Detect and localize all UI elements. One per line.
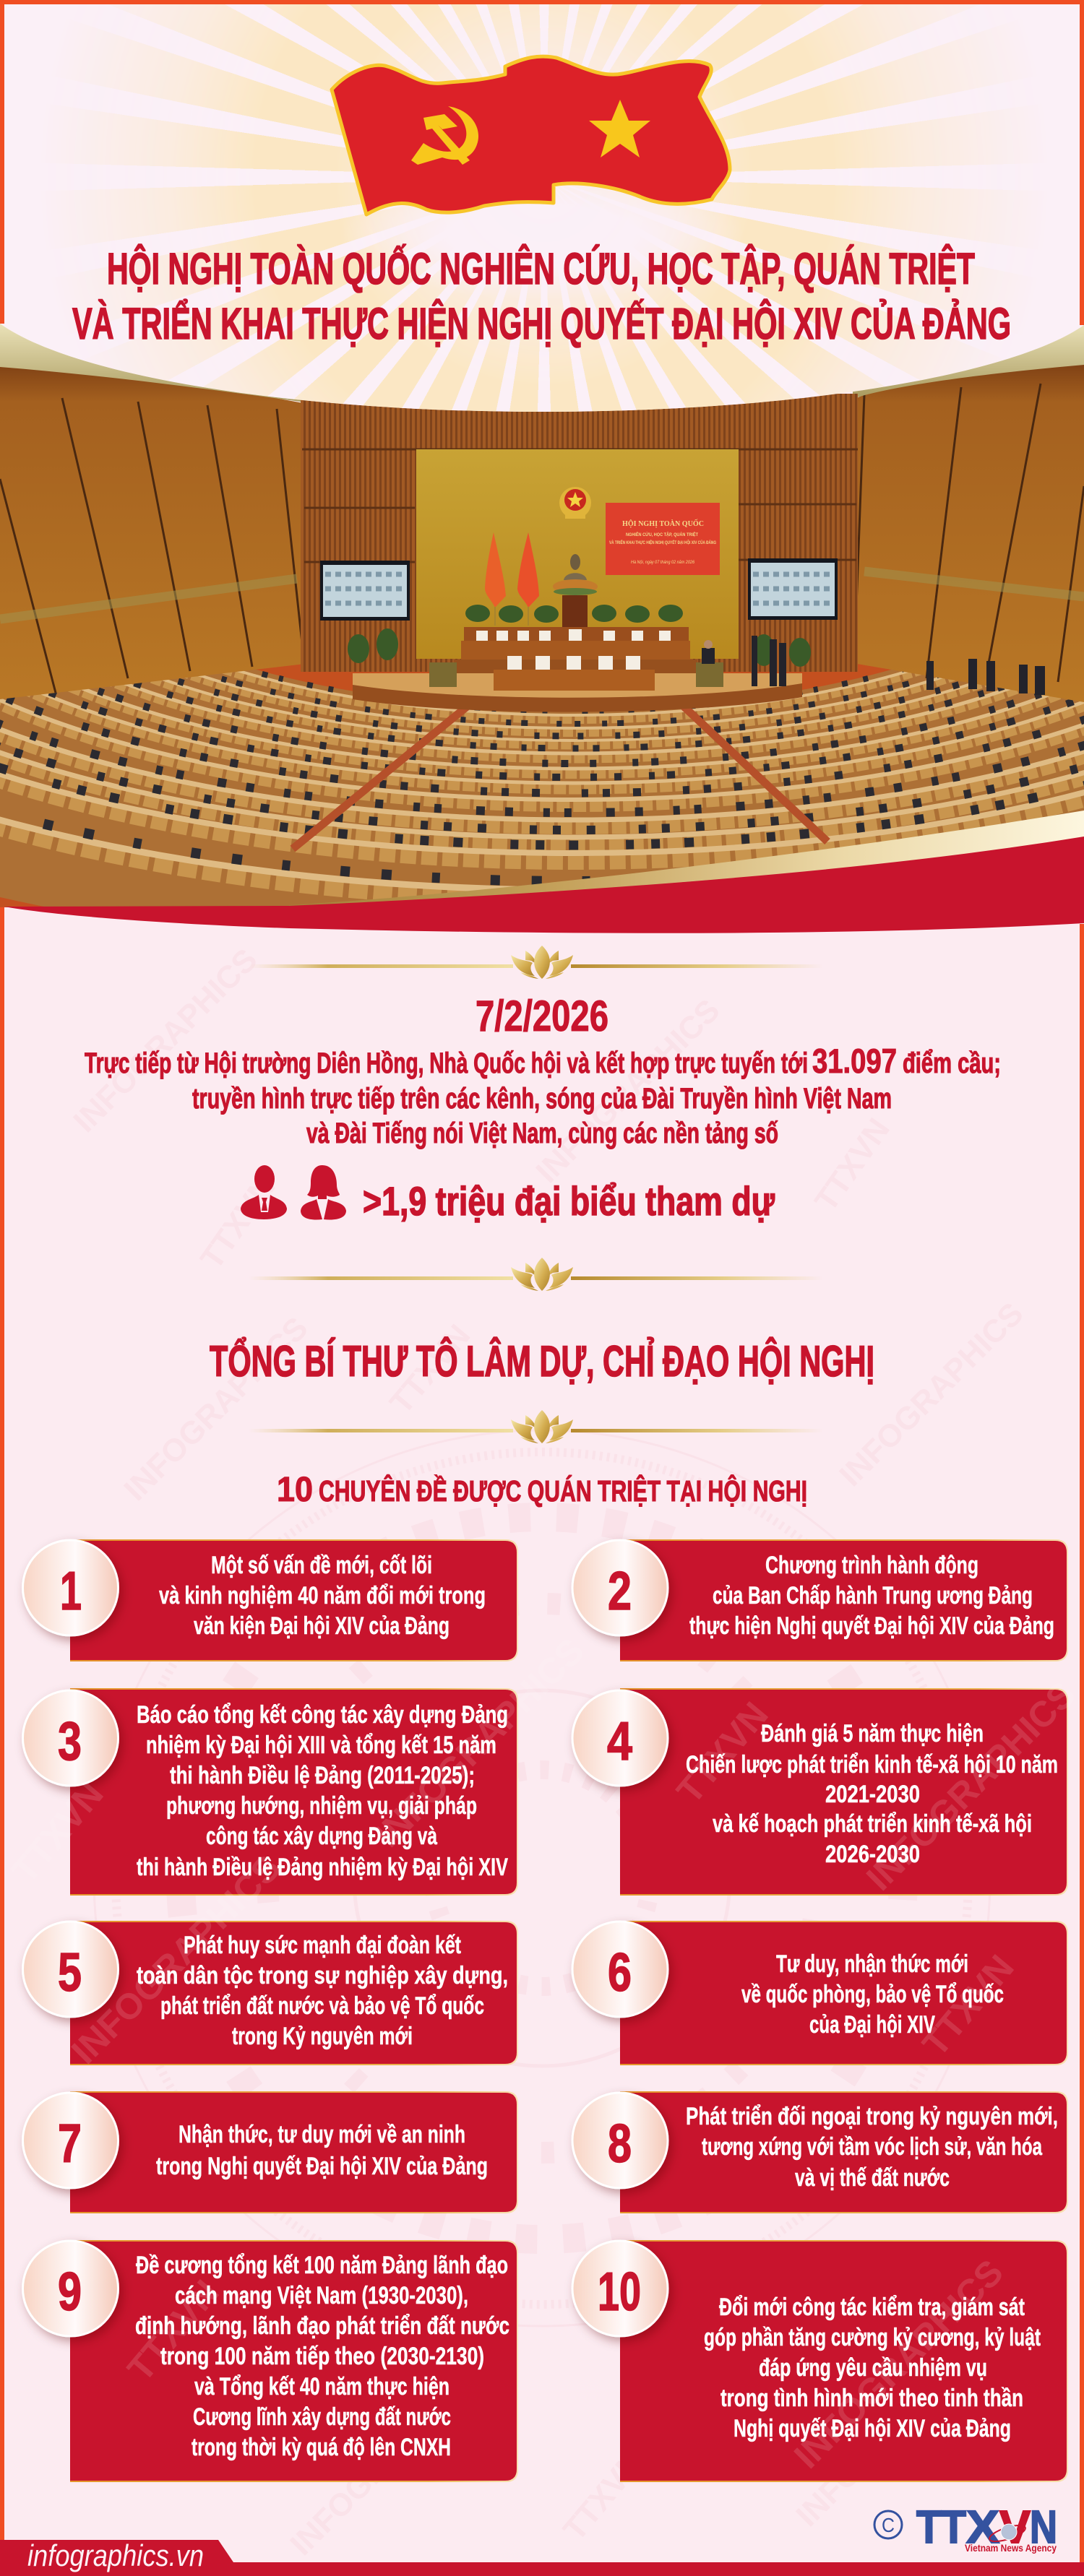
card 2 text xyxy=(689,1552,1054,1640)
card 7 text: Nhận thức, tư duy mới về an ninh xyxy=(178,2121,465,2148)
card 7 text: trong Nghị quyết Đại hội XIV của Đảng xyxy=(156,2153,488,2180)
attendance figure: >1,9 triệu đại biểu tham dự xyxy=(363,1178,775,1224)
copyright mark: C xyxy=(882,2514,895,2536)
card 6 text: Tư duy, nhận thức mới xyxy=(776,1950,968,1978)
agency wordmark: T xyxy=(941,2501,966,2553)
heading: ten topics: 10 xyxy=(277,1471,313,1509)
red conference poster: NGHIÊN CỨU, HỌC TẬP, QUÁN TRIỆT xyxy=(626,531,698,537)
number badge 6: 6 xyxy=(608,1942,632,2002)
watermarks over cards: TTXVN xyxy=(4,1774,111,1890)
number badge 7: 7 xyxy=(58,2113,82,2174)
card 1 text: Một số vấn đề mới, cốt lõi xyxy=(211,1552,432,1579)
hall floor xyxy=(0,664,891,907)
number badge 4: 4 xyxy=(607,1711,632,1771)
aisles xyxy=(293,704,827,849)
photo: national assembly hall xyxy=(0,324,1084,907)
right wall xyxy=(853,361,1084,702)
card 4 text xyxy=(686,1720,1058,1868)
watermarks on page background: INFOGRAPHICS xyxy=(117,1310,315,1508)
card 9 text: trong 100 năm tiếp theo (2030-2130) xyxy=(160,2343,484,2370)
red conference poster xyxy=(606,503,720,575)
card 10 xyxy=(572,2240,1068,2482)
white chairs xyxy=(476,629,671,670)
wall seams xyxy=(0,384,1084,693)
footer site name: infographics.vn xyxy=(27,2538,204,2572)
divider 1 xyxy=(249,946,823,979)
gold swoosh under photo xyxy=(289,811,1084,907)
watermarks over cards: TTXVN xyxy=(120,2273,227,2389)
seating rows xyxy=(0,670,1084,899)
heading: ten topics xyxy=(277,1471,807,1509)
watermarks over cards: TTXVN xyxy=(669,1695,776,1811)
bust and flowers xyxy=(553,554,598,595)
agency wordmark: N xyxy=(1030,2501,1057,2553)
red swoosh under photo xyxy=(4,837,1084,933)
background and assembly hall photo xyxy=(0,324,1084,2328)
date: 7/2/2026 xyxy=(476,992,608,1040)
watermarks on page background xyxy=(66,942,1031,2562)
red conference poster: VÀ TRIỂN KHAI THỰC HIỆN NGHỊ QUYẾT ĐẠI HỘI XIV CỦA ĐẢNG xyxy=(609,538,716,545)
agency wordmark xyxy=(916,2501,1057,2553)
number badge 10: 10 xyxy=(598,2261,641,2322)
card 5 text xyxy=(137,1932,508,2050)
ceiling right xyxy=(853,325,1084,397)
party flag xyxy=(332,56,730,215)
intro paragraph: điểm cầu; xyxy=(903,1047,1001,1079)
header sunburst dome xyxy=(0,0,1084,433)
card 10 text xyxy=(704,2294,1041,2442)
card 3 text: nhiệm kỳ Đại hội XIII và tổng kết 15 năm xyxy=(146,1732,496,1759)
lecterns xyxy=(429,662,723,687)
card 7 text xyxy=(156,2121,488,2180)
speaker and camera crews xyxy=(702,636,1045,695)
watermarks over cards: INFOGRAPHICS xyxy=(367,1630,592,1855)
icon: hammer and sickle xyxy=(411,106,478,165)
golden backdrop xyxy=(416,449,739,659)
delegates in rows xyxy=(0,671,1084,886)
agency wordmark: X xyxy=(966,2501,999,2553)
watermarks on page background: INFOGRAPHICS xyxy=(833,1296,1031,1493)
icon: female delegate xyxy=(301,1165,346,1219)
number badge 7 xyxy=(23,2093,119,2188)
card 3 text: thi hành Điều lệ Đảng nhiệm kỳ Đại hội XIV xyxy=(137,1854,508,1881)
agency name: Vietnam News Agency xyxy=(965,2542,1057,2554)
national flag on stage xyxy=(517,532,539,608)
card 4 text: 2026-2030 xyxy=(825,1841,920,1868)
card 9 text: cách mạng Việt Nam (1930-2030), xyxy=(175,2282,468,2309)
card 8 text xyxy=(686,2103,1058,2192)
agency wordmark: T xyxy=(916,2501,942,2553)
card 8 xyxy=(572,2091,1068,2213)
card 9 text: Cương lĩnh xây dựng đất nước xyxy=(193,2403,451,2431)
number badge 4 xyxy=(572,1690,668,1786)
panel breaks xyxy=(302,449,858,562)
heading: ten topics: CHUYÊN ĐỀ ĐƯỢC QUÁN TRIỆT TẠI HỘI NGHỊ xyxy=(319,1474,807,1508)
card 1 text xyxy=(159,1552,486,1640)
divider 2 xyxy=(249,1258,823,1291)
number badge 9 xyxy=(23,2241,119,2336)
number badge 8: 8 xyxy=(608,2113,632,2174)
watermarks on page background: TTXVN xyxy=(194,1170,283,1276)
card 2 xyxy=(572,1539,1068,1661)
watermarks over cards: INFOGRAPHICS xyxy=(786,2252,1011,2476)
national emblem xyxy=(559,487,591,519)
intro paragraph: Trực tiếp từ Hội trường Diên Hồng, Nhà Quốc hội và kết hợp trực tuyến tới xyxy=(85,1047,808,1079)
globe xyxy=(988,2522,1027,2545)
number badge 6 xyxy=(572,1922,668,2017)
watermarks on page background: INFOGRAPHICS xyxy=(529,993,727,1190)
card 9 text: định hướng, lãnh đạo phát triển đất nước xyxy=(135,2312,509,2340)
flag poles xyxy=(495,607,528,626)
card 1 xyxy=(23,1539,518,1661)
intro paragraph: 31.097 xyxy=(812,1042,897,1080)
intro paragraph: và Đài Tiếng nói Việt Nam, cùng các nền tảng số xyxy=(306,1118,778,1149)
agency wordmark: V xyxy=(999,2501,1031,2553)
card 9 text xyxy=(135,2252,509,2461)
number badge 9: 9 xyxy=(58,2261,82,2322)
card 3 text: thi hành Điều lệ Đảng (2011-2025); xyxy=(170,1762,475,1789)
right screen xyxy=(748,558,838,620)
footer band xyxy=(0,2540,1084,2576)
card 6 text xyxy=(741,1950,1004,2039)
watermarks on page background: INFOGRAPHICS xyxy=(66,942,264,1139)
card 1 text: và kinh nghiệm 40 năm đổi mới trong xyxy=(159,1582,486,1609)
watermarks over cards: TTXVN xyxy=(915,1948,1022,2064)
watermarks on page background: TTXVN xyxy=(556,2445,650,2547)
card 9 xyxy=(23,2240,518,2482)
left screen xyxy=(320,561,410,621)
number badge 8 xyxy=(572,2093,668,2188)
party flag on stage xyxy=(485,532,506,608)
card 1 text: văn kiện Đại hội XIV của Đảng xyxy=(194,1612,449,1640)
card 5 text: Phát huy sức mạnh đại đoàn kết xyxy=(184,1932,461,1959)
number badge 5 xyxy=(23,1922,119,2017)
logo: TTXVN xyxy=(874,2501,1057,2554)
title xyxy=(72,244,1011,348)
number badge 1: 1 xyxy=(60,1560,82,1621)
card 9 text: Đề cương tổng kết 100 năm Đảng lãnh đạo xyxy=(136,2252,508,2279)
number badge 2 xyxy=(572,1540,668,1635)
stage tiers xyxy=(353,627,802,712)
card 10 text: đáp ứng yêu cầu nhiệm vụ xyxy=(759,2354,987,2382)
watermarks on page background: TTXVN xyxy=(383,1318,477,1420)
number badge 2: 2 xyxy=(608,1560,632,1621)
card 7 xyxy=(23,2091,518,2213)
card 5 xyxy=(23,1921,518,2065)
number badge 5: 5 xyxy=(58,1942,82,2002)
number badge 10 xyxy=(572,2241,668,2336)
card 3 text: Báo cáo tổng kết công tác xây dựng Đảng xyxy=(137,1701,508,1729)
watermarks over cards: INFOGRAPHICS xyxy=(859,1674,1083,1898)
number badge 3: 3 xyxy=(58,1711,82,1771)
card 6 xyxy=(572,1921,1068,2065)
red conference poster: HỘI NGHỊ TOÀN QUỐC xyxy=(622,519,704,528)
card 8 text: và vị thế đất nước xyxy=(795,2164,950,2192)
number badge 1 xyxy=(23,1540,119,1635)
card 9 text: và Tổng kết 40 năm thực hiện xyxy=(194,2373,449,2400)
card 3 xyxy=(23,1688,518,1896)
watermarks on page background: TTXVN xyxy=(808,1112,897,1218)
card 3 text xyxy=(137,1701,508,1881)
red conference poster: Hà Nội, ngày 07 tháng 02 năm 2026 xyxy=(631,561,695,565)
card 4 text: Đánh giá 5 năm thực hiện xyxy=(761,1720,984,1747)
wall bands xyxy=(0,571,1084,619)
card 3 text: công tác xây dựng Đảng và xyxy=(206,1823,437,1850)
watermarks over cards xyxy=(4,1630,1083,2476)
centre wood wall xyxy=(301,394,858,672)
divider 3 xyxy=(249,1410,823,1443)
left wall xyxy=(0,361,311,699)
watermarks on page background: INFOGRAPHICS xyxy=(789,2336,987,2533)
icon: male delegate xyxy=(241,1165,287,1219)
card 4 xyxy=(572,1688,1068,1896)
number badge 3 xyxy=(23,1690,119,1786)
icon: yellow star xyxy=(589,100,650,157)
podium xyxy=(562,595,588,640)
card 6 text: của Đại hội XIV xyxy=(809,2011,935,2039)
copyright mark xyxy=(874,2511,902,2538)
potted plants xyxy=(348,605,811,667)
card 5 text: trong Kỷ nguyên mới xyxy=(232,2023,413,2050)
drum watermark xyxy=(94,1430,990,2326)
watermarks on page background: INFOGRAPHICS xyxy=(283,2365,481,2562)
card 2 text: Chương trình hành động xyxy=(765,1552,978,1579)
card 4 text: 2021-2030 xyxy=(825,1781,920,1808)
card 5 text: toàn dân tộc trong sự nghiệp xây dựng, xyxy=(137,1962,508,1989)
card 5 text: phát triển đất nước và bảo vệ Tổ quốc xyxy=(160,1992,484,2020)
seating block base xyxy=(0,670,1084,907)
ceiling left xyxy=(0,324,301,402)
card 9 text: trong thời kỳ quá độ lên CNXH xyxy=(192,2434,451,2461)
intro paragraph xyxy=(85,1042,1001,1149)
card 3 text: phương hướng, nhiệm vụ, giải pháp xyxy=(166,1792,477,1820)
watermarks over cards: INFOGRAPHICS xyxy=(64,1847,288,2072)
